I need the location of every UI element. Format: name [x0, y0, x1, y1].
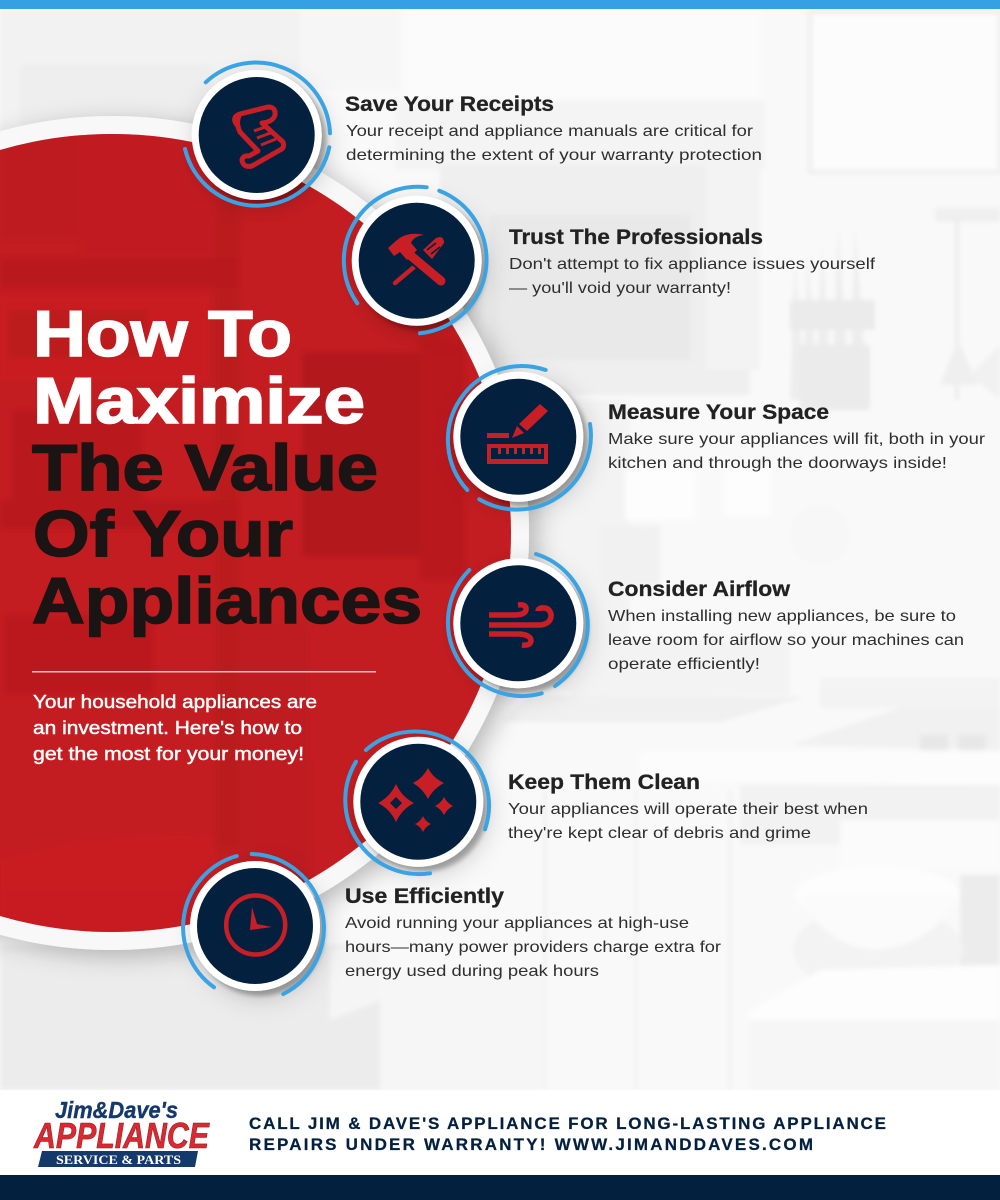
title: Maximize — [33, 364, 365, 437]
description: hours—many power providers charge extra for — [345, 939, 722, 956]
icon: hammer and screwdriver badge — [344, 187, 487, 333]
description — [508, 801, 868, 842]
heading: Trust The Professionals — [509, 226, 763, 249]
title: The Value — [32, 431, 378, 504]
description: When installing new appliances, be sure to — [608, 608, 956, 625]
heading: Consider Airflow — [608, 578, 791, 601]
white ring around red circle — [0, 116, 529, 950]
intro text: an investment. Here's how to — [33, 718, 302, 738]
description: Your receipt and appliance manuals are critical for — [346, 123, 754, 140]
icon: pencil and ruler badge — [448, 366, 591, 510]
top blue bar — [0, 0, 1000, 9]
title — [32, 297, 422, 637]
call to action: CALL JIM & DAVE'S APPLIANCE FOR LONG-LASTING APPLIANCE — [249, 1114, 886, 1133]
item 2: trust the professionals — [344, 187, 876, 333]
item 4: consider airflow — [448, 554, 964, 696]
description: determining the extent of your warranty protection — [346, 147, 762, 164]
description — [346, 123, 762, 164]
item 5: keep them clean — [345, 732, 868, 874]
icon: wind badge — [448, 554, 588, 696]
call to action: REPAIRS UNDER WARRANTY! WWW.JIMANDDAVES.COM — [249, 1135, 813, 1154]
call to action — [249, 1114, 886, 1154]
heading: Use Efficiently — [345, 885, 504, 908]
logo: Jim&Dave's — [55, 1097, 178, 1123]
logo: SERVICE & PARTS — [56, 1152, 181, 1167]
title: How To — [33, 297, 292, 370]
heading: Measure Your Space — [608, 401, 829, 424]
logo — [33, 1097, 210, 1167]
icon: clock badge — [183, 854, 324, 994]
title: Appliances — [32, 564, 422, 637]
description — [608, 608, 964, 673]
description: energy used during peak hours — [345, 963, 599, 980]
footer band — [0, 1090, 1000, 1200]
icon: receipt scroll badge — [185, 63, 330, 206]
description: operate efficiently! — [608, 656, 760, 673]
item 3: measure your space — [448, 366, 986, 510]
intro text: get the most for your money! — [33, 744, 304, 764]
description — [608, 431, 986, 472]
logo: APPLIANCE — [33, 1115, 210, 1156]
description: Don't attempt to fix appliance issues yourself — [509, 256, 876, 273]
description: Your appliances will operate their best when — [508, 801, 868, 818]
intro text — [33, 692, 317, 764]
title: Of Your — [33, 497, 293, 570]
item 1: save your receipts — [185, 63, 762, 206]
item 6: use efficiently — [183, 854, 722, 994]
panel: red circle — [0, 100, 520, 970]
description: they're kept clear of debris and grime — [508, 825, 811, 842]
description — [509, 256, 876, 297]
description: — you'll void your warranty! — [509, 280, 731, 297]
intro text: Your household appliances are — [33, 692, 317, 712]
description: leave room for airflow so your machines can — [608, 632, 964, 649]
description: Make sure your appliances will fit, both in your — [608, 431, 986, 448]
icon: sparkles badge — [345, 732, 489, 874]
description — [345, 915, 722, 980]
heading: Keep Them Clean — [508, 771, 700, 794]
description: kitchen and through the doorways inside! — [608, 455, 947, 472]
description: Avoid running your appliances at high-use — [345, 915, 689, 932]
heading: Save Your Receipts — [345, 93, 554, 116]
